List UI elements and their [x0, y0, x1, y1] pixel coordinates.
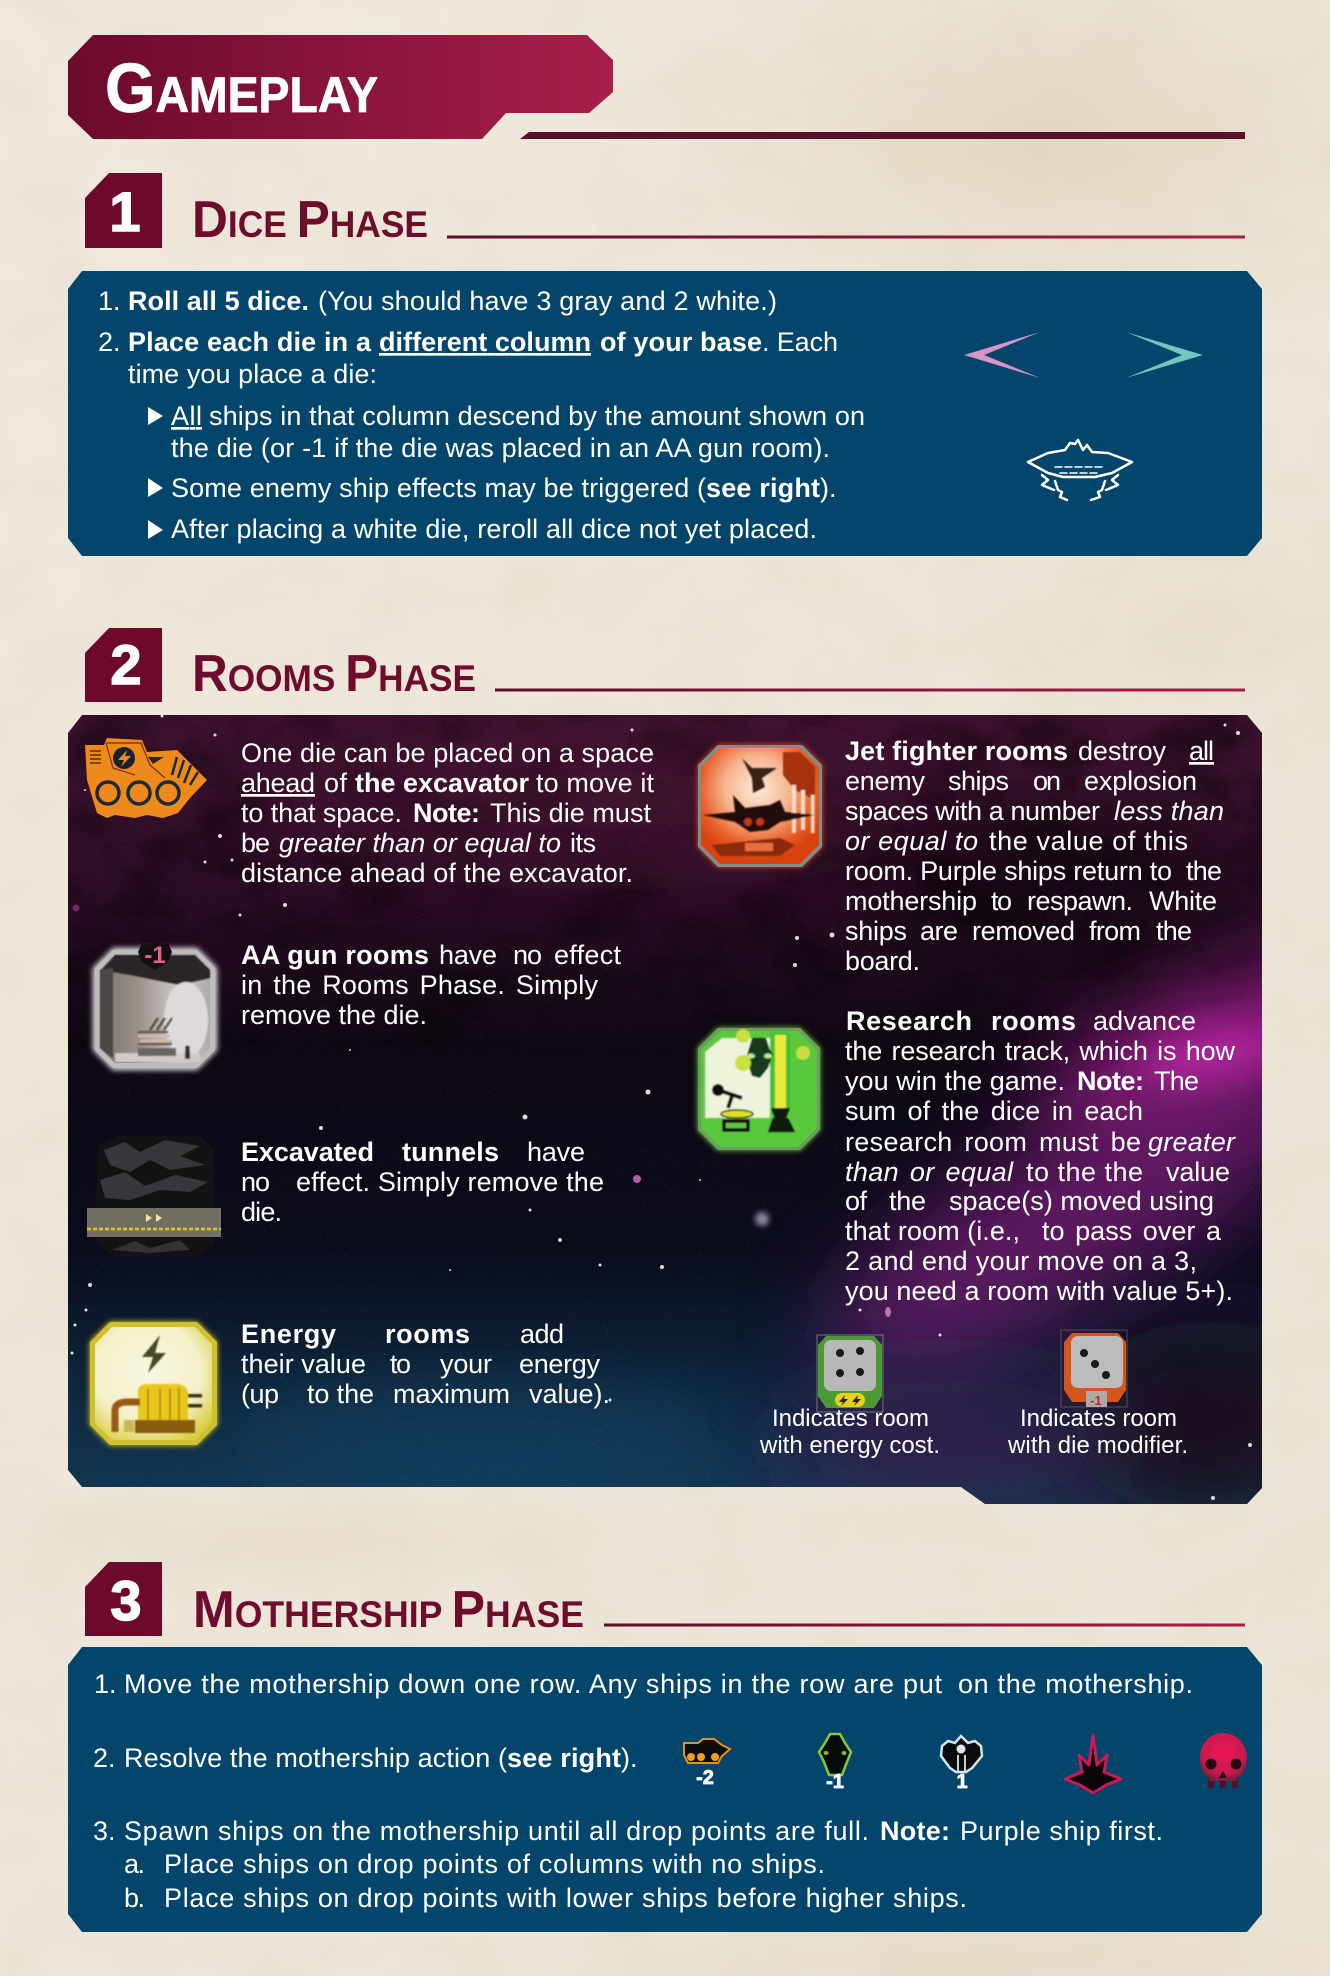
- icon: excavator minus 2: -2: [696, 1767, 714, 1789]
- step 2 text: ).: [621, 1743, 638, 1773]
- text: research rooms: The: [1154, 1066, 1199, 1096]
- bullet: all ships descend: All: [171, 401, 202, 431]
- caption: energy cost: Indicates room: [772, 1405, 929, 1432]
- text: research rooms: to pass over a: [1042, 1216, 1222, 1246]
- step 2 text: [98, 327, 838, 389]
- text: research rooms: Research: [846, 1006, 972, 1036]
- text: energy rooms: (up: [241, 1379, 279, 1409]
- text: research rooms: space(s) moved using: [949, 1186, 1214, 1216]
- die: die modifier: [1061, 1330, 1127, 1408]
- text: energy rooms: to: [390, 1349, 411, 1379]
- text: research rooms: [845, 1006, 1236, 1306]
- bullet: enemy ship effects: see right: [706, 473, 820, 503]
- text: research rooms: advance: [1093, 1006, 1196, 1036]
- icon: white ship 1: [941, 1736, 982, 1793]
- icon: excavated tunnel: [87, 1136, 221, 1256]
- text: jet fighter rooms: or equal to: [845, 826, 978, 856]
- die: energy cost: [817, 1335, 883, 1412]
- number badge 1: 1: [109, 180, 141, 243]
- text: jet fighter rooms: ships: [948, 766, 1009, 796]
- step 1 text: Move the mothership down one row. Any ships in the row are put: [124, 1669, 942, 1699]
- text: jet fighter rooms: respawn.: [1027, 886, 1133, 916]
- icon: research room: [698, 1028, 820, 1150]
- icon: green ship minus 1: -1: [826, 1771, 844, 1793]
- text: excavator: [241, 738, 654, 888]
- text: research rooms: the research track, which is how: [845, 1036, 1236, 1066]
- text: excavated tunnels: no: [241, 1167, 270, 1197]
- text: AA gun rooms: remove the die.: [241, 1000, 427, 1030]
- step 2 text: 2.: [98, 327, 121, 357]
- text: AA gun rooms: no: [513, 940, 542, 970]
- step 1 text: 1.: [98, 286, 121, 316]
- text: research rooms: rooms: [991, 1006, 1076, 1036]
- bullet: enemy ship effects: ).: [820, 473, 836, 503]
- text: AA gun rooms: effect: [554, 940, 621, 970]
- step 1 text: 1.: [94, 1669, 117, 1699]
- text: energy rooms: add: [520, 1319, 564, 1349]
- step 2 text: Resolve the mothership action (: [124, 1743, 507, 1773]
- text: jet fighter rooms: ships: [845, 916, 907, 946]
- text: AA gun rooms: in the Rooms Phase. Simply: [241, 970, 598, 1000]
- heading: dice phase: DICE PHASE: [192, 191, 428, 249]
- step 2 text: of your base: [600, 327, 762, 357]
- text: excavator: This die must: [490, 798, 651, 828]
- text: jet fighter rooms: all: [1189, 736, 1214, 766]
- caption: die modifier: with die modifier.: [1007, 1432, 1188, 1459]
- text: excavated tunnels: have: [527, 1137, 585, 1167]
- bullet: reroll: After placing a white die, reroll all dice not yet placed.: [171, 514, 817, 544]
- number badge 1: [85, 173, 162, 248]
- text: excavator: to that space.: [241, 798, 402, 828]
- text: excavated tunnels: [241, 1137, 604, 1227]
- caption: die modifier: [1007, 1405, 1188, 1459]
- icon: skull: [1200, 1733, 1247, 1788]
- caption: die modifier: Indicates room: [1020, 1405, 1177, 1432]
- text: jet fighter rooms: removed: [972, 916, 1075, 946]
- text: jet fighter rooms: from: [1089, 916, 1141, 946]
- step 3 text: Purple ship first.: [960, 1816, 1163, 1846]
- bullet: enemy ship effects: Some enemy ship effects may be triggered (: [171, 473, 706, 503]
- step 3 text: Note:: [880, 1816, 950, 1846]
- icon: explosion: [1065, 1735, 1121, 1793]
- text: research rooms: of: [845, 1186, 867, 1216]
- text: jet fighter rooms: destroy: [1078, 736, 1166, 766]
- text: excavator: of: [324, 768, 347, 798]
- text: energy rooms: energy: [519, 1349, 600, 1379]
- text: research rooms: you need a room with value 5+).: [845, 1276, 1233, 1306]
- text: AA gun rooms: AA gun rooms: [241, 940, 429, 970]
- text: jet fighter rooms: are: [920, 916, 958, 946]
- text: AA gun rooms: have: [439, 940, 497, 970]
- text: excavated tunnels: die.: [241, 1197, 282, 1227]
- number badge 3: [85, 1562, 162, 1636]
- text: jet fighter rooms: White: [1149, 886, 1217, 916]
- text: excavated tunnels: Excavated: [241, 1137, 374, 1167]
- section 2 heading: [85, 628, 1245, 703]
- step 2 text: 2.: [93, 1743, 116, 1773]
- text: jet fighter rooms: on: [1033, 766, 1061, 796]
- heading: rooms phase: ROOMS PHASE: [192, 645, 476, 703]
- text: jet fighter rooms: [845, 736, 1224, 976]
- text: research rooms: research room must be: [845, 1127, 1141, 1157]
- text: excavator: to move it: [536, 768, 654, 798]
- text: jet fighter rooms: the value of this: [989, 826, 1188, 856]
- step 2 text: . Each: [762, 327, 838, 357]
- bullet: all ships descend: ships in that column descend by the amount shown on: [209, 401, 865, 431]
- text: jet fighter rooms: less than: [1114, 796, 1224, 826]
- text: jet fighter rooms: room. Purple ships return to: [845, 856, 1172, 886]
- text: jet fighter rooms: Jet fighter rooms: [845, 736, 1068, 766]
- text: research rooms: Note:: [1077, 1066, 1144, 1096]
- step 1 text: Roll all 5 dice.: [128, 286, 309, 316]
- icon: AA gun room: -1: [144, 942, 166, 969]
- text: AA gun rooms: [241, 940, 621, 1030]
- text: excavator: One die can be placed on a space: [241, 738, 654, 768]
- text: jet fighter rooms: the: [1156, 916, 1192, 946]
- title text: GAMEPLAY: [105, 49, 378, 127]
- text: energy rooms: maximum: [393, 1379, 510, 1409]
- icon: energy room: [90, 1322, 217, 1445]
- step 3 text: Spawn ships on the mothership until all drop points are full.: [124, 1816, 869, 1846]
- text: jet fighter rooms: board.: [845, 946, 920, 976]
- icon: white ship 1: 1: [956, 1771, 968, 1793]
- text: research rooms: value: [1166, 1157, 1230, 1187]
- number badge 2: [85, 628, 162, 702]
- text: excavated tunnels: effect. Simply remove the: [296, 1167, 604, 1197]
- step 3 text: 3.: [93, 1816, 116, 1846]
- text: energy rooms: Energy: [241, 1319, 336, 1349]
- step 3 text: Place ships on drop points of columns with no ships.: [164, 1849, 825, 1879]
- icon: mothership outline: [1028, 440, 1132, 500]
- text: energy rooms: their value: [241, 1349, 366, 1379]
- panel: dice phase: [68, 271, 1262, 556]
- text: research rooms: that room (i.e.,: [845, 1216, 1020, 1246]
- title banner: [68, 35, 613, 139]
- text: excavator: greater than or equal to: [279, 828, 561, 858]
- step 2 text: Place each die in a: [128, 327, 372, 357]
- die: die modifier: -1: [1090, 1393, 1102, 1408]
- text: energy rooms: to the: [307, 1379, 374, 1409]
- step 3 text: Place ships on drop points with lower ships before higher ships.: [164, 1883, 967, 1913]
- text: research rooms: to the the: [1026, 1157, 1143, 1187]
- step 1 text: (You should have 3 gray and 2 white.): [318, 286, 777, 316]
- text: jet fighter rooms: spaces with a number: [845, 796, 1100, 826]
- text: research rooms: you win the game.: [845, 1066, 1065, 1096]
- bullet: all ships descend: the die (or -1 if the die was placed in an AA gun room).: [171, 433, 830, 463]
- text: jet fighter rooms: to: [991, 886, 1012, 916]
- text: energy rooms: [241, 1319, 610, 1409]
- caption: energy cost: [759, 1405, 940, 1459]
- icon: teal chevron: [1126, 332, 1203, 378]
- number badge 3: 3: [110, 1569, 142, 1632]
- text: jet fighter rooms: the: [1186, 856, 1222, 886]
- text: research rooms: greater: [1148, 1127, 1236, 1157]
- step 3 text: [93, 1816, 1163, 1913]
- text: research rooms: sum of the dice in each: [845, 1096, 1143, 1126]
- text: excavator: be: [241, 828, 270, 858]
- step 2 text: see right: [507, 1743, 621, 1773]
- section 1 heading: [85, 173, 1245, 249]
- text: jet fighter rooms: enemy: [845, 766, 926, 796]
- space background: [68, 714, 1330, 1520]
- icon: jet fighter room: [698, 745, 822, 867]
- step 2 text: time you place a die:: [128, 359, 377, 389]
- icon: green ship minus 1: [819, 1734, 851, 1793]
- text: energy rooms: value).: [529, 1379, 610, 1409]
- text: research rooms: 2 and end your move on a 3,: [845, 1246, 1197, 1276]
- text: jet fighter rooms: mothership: [845, 886, 977, 916]
- text: excavator: its: [570, 828, 596, 858]
- text: jet fighter rooms: explosion: [1084, 766, 1197, 796]
- text: research rooms: than or equal: [845, 1157, 1014, 1187]
- heading: mothership phase: MOTHERSHIP PHASE: [193, 1581, 584, 1639]
- icon: excavator minus 2: [684, 1739, 730, 1789]
- text: excavator: distance ahead of the excavator.: [241, 858, 633, 888]
- icon: excavator: [85, 738, 207, 818]
- text: research rooms: the: [889, 1186, 926, 1216]
- panel: mothership phase: [68, 1647, 1262, 1932]
- caption: energy cost: with energy cost.: [759, 1432, 940, 1459]
- step 3 text: a.: [124, 1849, 145, 1879]
- icon: pink chevron: [964, 332, 1040, 378]
- text: excavator: ahead: [241, 768, 315, 798]
- text: excavator: the excavator: [355, 768, 529, 798]
- step 2 text: different column: [379, 327, 591, 357]
- step 3 text: b.: [124, 1883, 145, 1913]
- text: excavator: Note:: [413, 798, 480, 828]
- step 1 text: [98, 286, 777, 316]
- text: energy rooms: your: [440, 1349, 492, 1379]
- text: excavated tunnels: tunnels: [402, 1137, 499, 1167]
- bullet: all ships descend: [148, 401, 865, 463]
- panel: rooms phase: [68, 714, 1330, 1520]
- step 1 text: on the mothership.: [958, 1669, 1193, 1699]
- title rule: [520, 132, 1245, 139]
- section 3 heading: [85, 1562, 1245, 1639]
- number badge 2: 2: [110, 633, 142, 696]
- icon: AA gun room: [93, 938, 217, 1070]
- text: energy rooms: rooms: [385, 1319, 470, 1349]
